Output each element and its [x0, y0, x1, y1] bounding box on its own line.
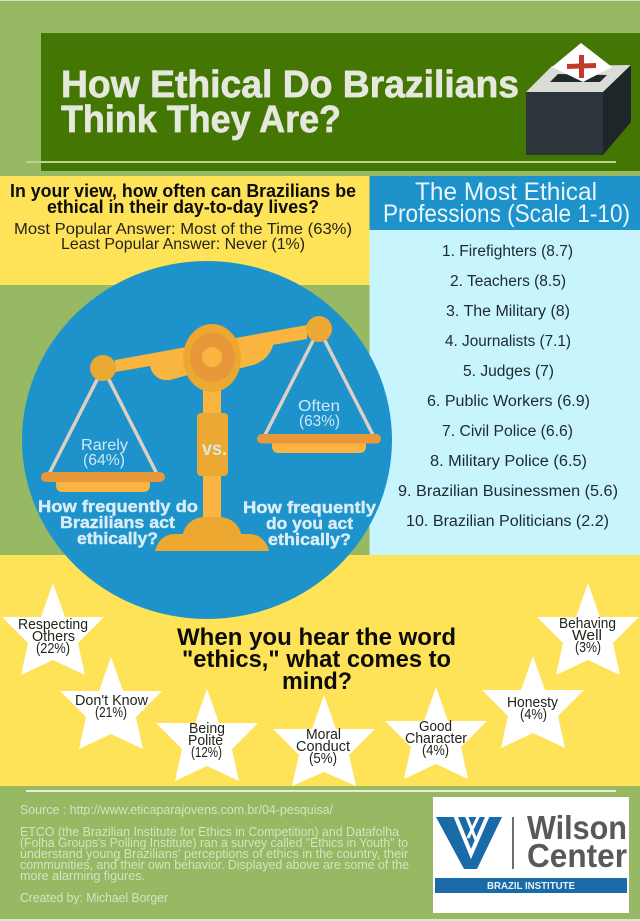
star: good character: (4%) [422, 743, 449, 759]
star: moral conduct [273, 695, 375, 786]
panel: professions heading: The Most Ethical [415, 178, 597, 206]
professions list: 3. The Military (8) [446, 303, 570, 320]
description [20, 825, 409, 883]
star: being polite: Being [189, 721, 225, 737]
label: often: Often [298, 398, 340, 415]
star: respecting others: (22%) [36, 641, 70, 657]
star: good character [385, 687, 487, 779]
professions list: 7. Civil Police (6.6) [442, 423, 573, 440]
header banner [26, 33, 640, 171]
professions list [398, 243, 618, 530]
logo bar [435, 878, 627, 893]
description: communities, and their own behavior. Displayed above are some of the [20, 858, 409, 872]
answers [14, 221, 352, 253]
star: respecting others: Respecting [18, 617, 88, 633]
star: don't know [60, 657, 162, 749]
star: behaving well: Behaving [559, 616, 616, 632]
ethics heading [177, 624, 456, 695]
professions list: 1. Firefighters (8.7) [442, 243, 573, 260]
professions list: 6. Public Workers (6.9) [427, 393, 590, 410]
star: good character: Good [419, 719, 452, 735]
question heading [10, 181, 356, 217]
description: ETCO (the Brazilian Institute for Ethics in Competition) and Datafolha [20, 825, 399, 839]
ethics heading: mind? [282, 668, 352, 695]
label: often: (63%) [299, 413, 340, 430]
right question [243, 498, 377, 549]
description: (Folha Groups's Polling Institute) ran a survey called "Ethics in Youth" to [20, 836, 408, 850]
title: Think They Are? [61, 99, 341, 141]
source line: Source : http://www.eticaparajovens.com.br/04-pesquisa/ [20, 802, 333, 817]
star: being polite: (12%) [191, 745, 222, 761]
icon: W mark [436, 815, 502, 869]
panel: professions heading [370, 176, 640, 230]
star: respecting others: Others [32, 629, 75, 645]
panel: professions background [370, 230, 640, 555]
icon: balance scale [41, 316, 381, 551]
left question: How frequently do [38, 497, 198, 516]
star: honesty: (4%) [520, 707, 547, 723]
label: often [298, 398, 340, 430]
left question: ethically? [77, 529, 158, 548]
label: vs: vs. [202, 439, 227, 460]
star: good character: Character [405, 731, 467, 747]
credit: Created by: Michael Borger [20, 890, 169, 905]
panel: footer [0, 786, 640, 919]
label: rarely: (64%) [83, 452, 125, 469]
logo wordmark: Center [527, 837, 627, 874]
right question: do you act [266, 514, 353, 533]
professions list: 9. Brazilian Businessmen (5.6) [398, 483, 618, 500]
ethics heading: "ethics," what comes to [182, 646, 451, 673]
logo wordmark: Wilson [527, 809, 627, 846]
right question: ethically? [268, 530, 351, 549]
ethics heading: When you hear the word [177, 624, 456, 651]
star: behaving well: (3%) [575, 640, 601, 656]
panel: day-to-day question [0, 176, 370, 285]
panel: yellow ethics section [0, 555, 640, 786]
question heading: In your view, how often can Brazilians be [10, 181, 356, 201]
title [61, 64, 519, 141]
answers: Least Popular Answer: Never (1%) [61, 236, 305, 253]
question heading: ethical in their day-to-day lives? [47, 197, 319, 217]
professions list: 2. Teachers (8.5) [450, 273, 566, 290]
blue circle with scale [22, 261, 392, 619]
icon: ballot box [526, 43, 631, 155]
star: don't know: (21%) [95, 705, 127, 721]
label: rarely: Rarely [81, 437, 128, 454]
star: behaving well: Well [572, 628, 602, 644]
star: honesty [482, 656, 584, 748]
professions list: 4. Journalists (7.1) [445, 333, 571, 350]
logo wordmark [527, 809, 627, 874]
star: moral conduct: Moral [306, 727, 341, 743]
answers: Most Popular Answer: Most of the Time (63%) [14, 221, 352, 238]
star: moral conduct: (5%) [309, 751, 337, 767]
star: behaving well [537, 583, 639, 675]
professions list: 5. Judges (7) [463, 363, 554, 380]
right question: How frequently [243, 498, 377, 517]
star: honesty: Honesty [507, 695, 559, 711]
star: being polite: Polite [188, 733, 223, 749]
star: respecting others [2, 583, 104, 675]
description: understand young Brazilians' perceptions of ethics in the country, their [20, 847, 408, 861]
panel: green band behind scale [0, 285, 370, 555]
title: How Ethical Do Brazilians [61, 64, 519, 106]
star: don't know: Don't Know [75, 693, 149, 709]
logo bar: BRAZIL INSTITUTE [487, 881, 575, 892]
professions list: 8. Military Police (6.5) [430, 453, 587, 470]
professions list: 10. Brazilian Politicians (2.2) [406, 513, 609, 530]
star: moral conduct: Conduct [296, 739, 350, 755]
logo: Wilson Center [433, 797, 629, 913]
left question [38, 497, 198, 548]
left question: Brazilians act [60, 513, 175, 532]
label: rarely [81, 437, 128, 469]
star: being polite [156, 689, 258, 781]
description: more alarming figures. [20, 869, 145, 883]
